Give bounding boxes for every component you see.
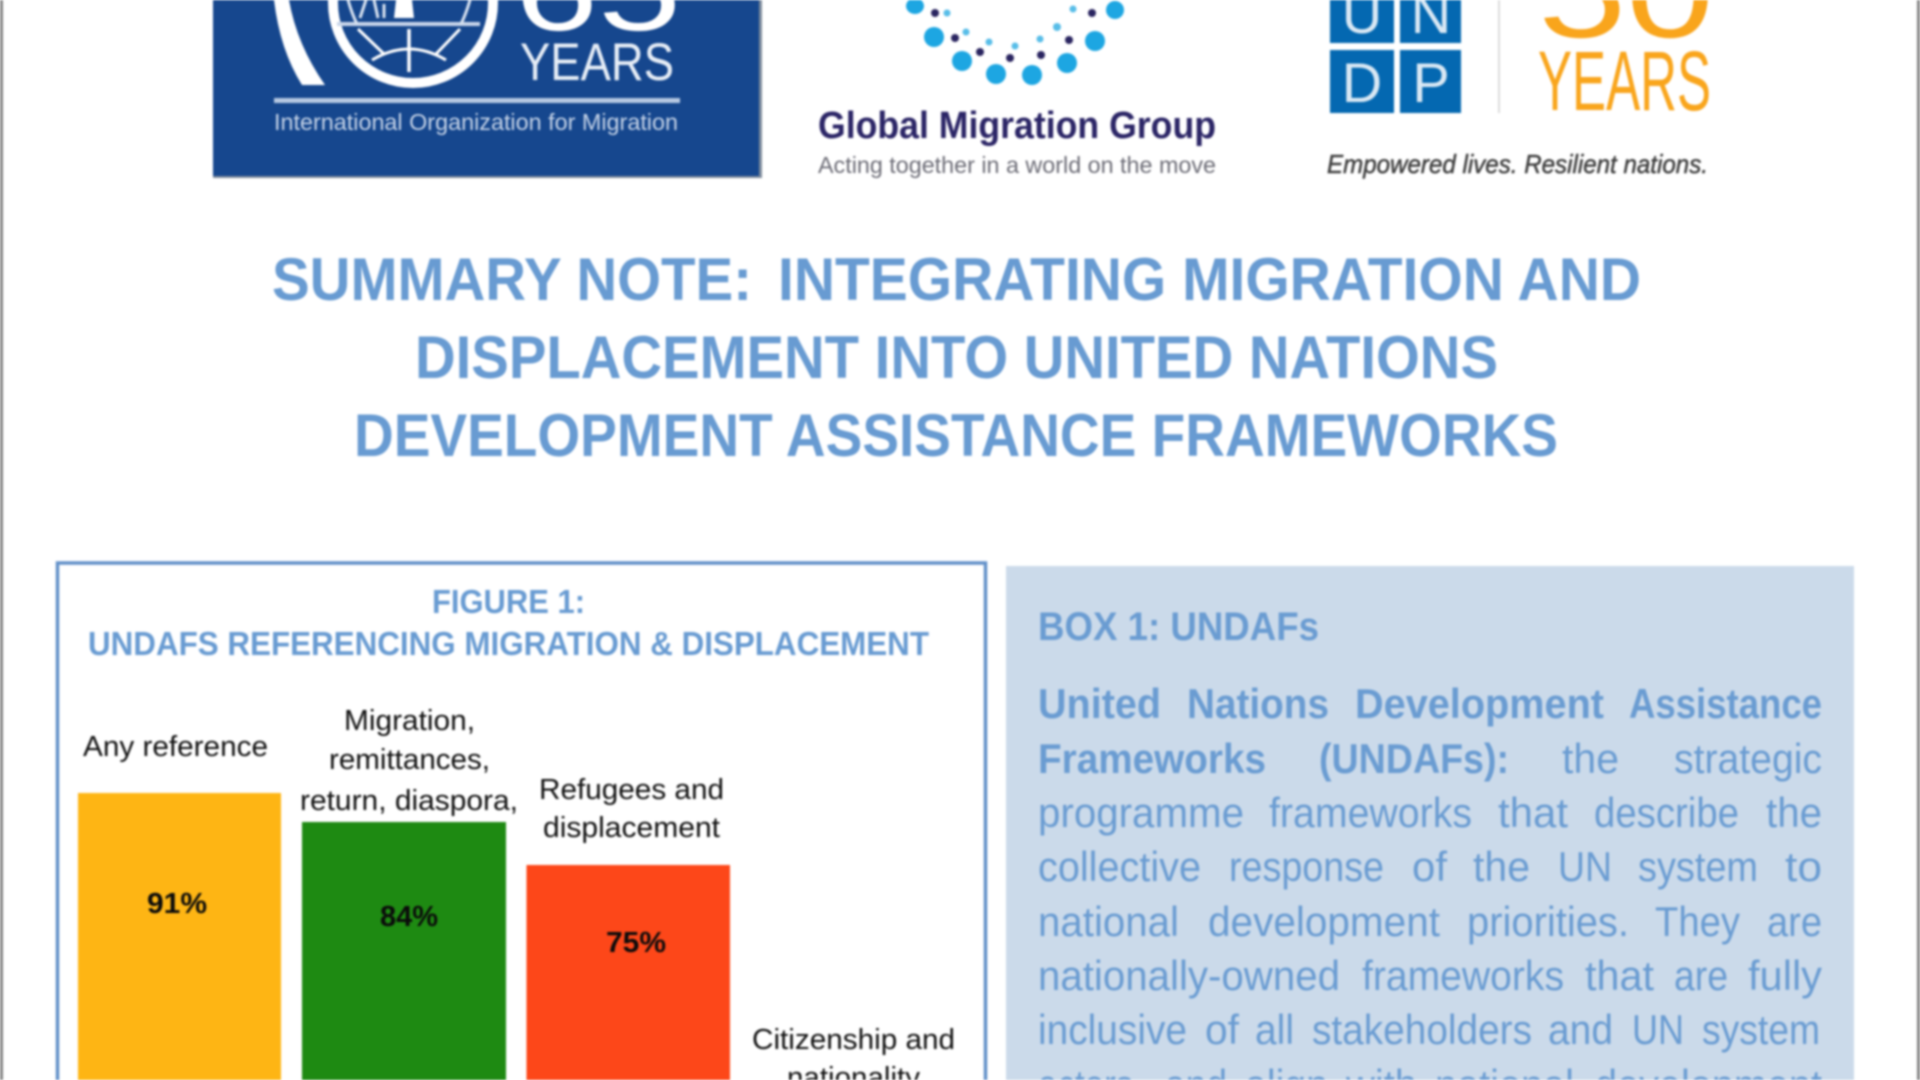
box body text <box>1038 680 1822 1080</box>
UNDP letters <box>1342 0 1451 114</box>
box body text: that <box>1585 952 1654 999</box>
box body text: that <box>1498 789 1568 836</box>
logo: IOM 65 years <box>213 0 762 178</box>
box body text: of <box>1412 843 1447 890</box>
box body text: response <box>1229 843 1384 890</box>
box body text: to <box>1785 843 1822 890</box>
box heading: BOX 1: UNDAFs <box>1038 605 1319 649</box>
box body text: nationally-owned <box>1038 952 1340 999</box>
bar: refugees 75%: 75% <box>606 927 666 959</box>
bar: refugees 75%: Refugees and <box>539 774 724 806</box>
box body text: Frameworks <box>1038 735 1266 782</box>
bar: migration 84%: return, diaspora, <box>300 785 518 817</box>
bar label: citizenship: Citizenship and <box>752 1024 955 1056</box>
icon: dot arc <box>906 0 1124 85</box>
YEARS orange: YEARS <box>1538 34 1711 128</box>
box body text: are <box>1767 898 1822 945</box>
group name: Global Migration Group <box>818 105 1216 147</box>
UNDP letters: P <box>1412 51 1450 114</box>
group tagline: Acting together in a world on the move <box>818 152 1216 178</box>
bar label: citizenship <box>752 1024 955 1080</box>
title: DEVELOPMENT ASSISTANCE FRAMEWORKS <box>354 402 1558 469</box>
box body text: strategic <box>1674 735 1822 782</box>
box body text: national <box>1038 898 1179 945</box>
box body text: are <box>1674 952 1728 999</box>
title: INTEGRATING MIGRATION AND <box>778 246 1641 313</box>
bar: migration 84%: remittances, <box>329 744 490 776</box>
figure heading <box>88 583 929 662</box>
box body text: frameworks <box>1269 789 1472 836</box>
box body text: development <box>1208 898 1440 945</box>
icon: IOM globe emblem <box>274 0 493 85</box>
box body text: stakeholders <box>1312 1006 1532 1053</box>
box body text: system <box>1702 1006 1820 1053</box>
box body text: Development <box>1355 680 1604 727</box>
box body text: and <box>1548 1006 1613 1053</box>
box body text: the <box>1473 843 1530 890</box>
panel: figure 1 <box>58 563 986 1080</box>
box body text: (UNDAFs): <box>1319 735 1509 782</box>
box body text: frameworks <box>1362 952 1564 999</box>
box body text: They <box>1655 898 1740 945</box>
bar chart <box>78 705 955 1080</box>
title: DISPLACEMENT INTO UNITED NATIONS <box>415 324 1498 391</box>
box body text: inclusive <box>1038 1006 1187 1053</box>
bar: any reference 91% <box>78 731 281 1080</box>
box body text: UN <box>1558 843 1612 890</box>
bar: migration 84% <box>300 705 518 1080</box>
UNDP letters: D <box>1342 51 1382 114</box>
figure heading: UNDAFS REFERENCING MIGRATION & DISPLACEMENT <box>88 625 929 662</box>
YEARS label: YEARS <box>520 33 674 92</box>
box body text: system <box>1638 843 1758 890</box>
box body text: Nations <box>1187 680 1329 727</box>
box body text: programme <box>1038 789 1244 836</box>
box body text: United <box>1038 680 1161 727</box>
box body text: the <box>1562 735 1619 782</box>
panel: box 1 UNDAFs <box>1006 566 1854 1080</box>
UNDP tagline: Empowered lives. Resilient nations. <box>1327 149 1708 179</box>
bar: refugees 75% <box>526 774 730 1080</box>
box body text: of <box>1205 1006 1239 1053</box>
box body text: UN <box>1632 1006 1684 1053</box>
logo: Global Migration Group <box>818 0 1216 178</box>
bar: refugees 75%: displacement <box>543 812 720 844</box>
box body text: the <box>1766 789 1822 836</box>
bar: migration 84%: 84% <box>380 901 438 933</box>
box body text: fully <box>1748 952 1822 999</box>
box body text: all <box>1255 1006 1294 1053</box>
box body text: describe <box>1594 789 1739 836</box>
organization name: International Organization for Migration <box>274 109 678 135</box>
box body text: Assistance <box>1629 680 1822 727</box>
bar: any reference 91%: 91% <box>147 888 207 920</box>
box body text: collective <box>1038 843 1201 890</box>
figure heading: FIGURE 1: <box>432 583 585 620</box>
bar: any reference 91%: Any reference <box>83 731 268 763</box>
title <box>272 246 1641 469</box>
box body text: priorities. <box>1467 898 1629 945</box>
logo: UNDP 50 years <box>1327 0 1714 179</box>
bar: migration 84%: Migration, <box>344 705 475 737</box>
title: SUMMARY NOTE: <box>272 246 752 313</box>
